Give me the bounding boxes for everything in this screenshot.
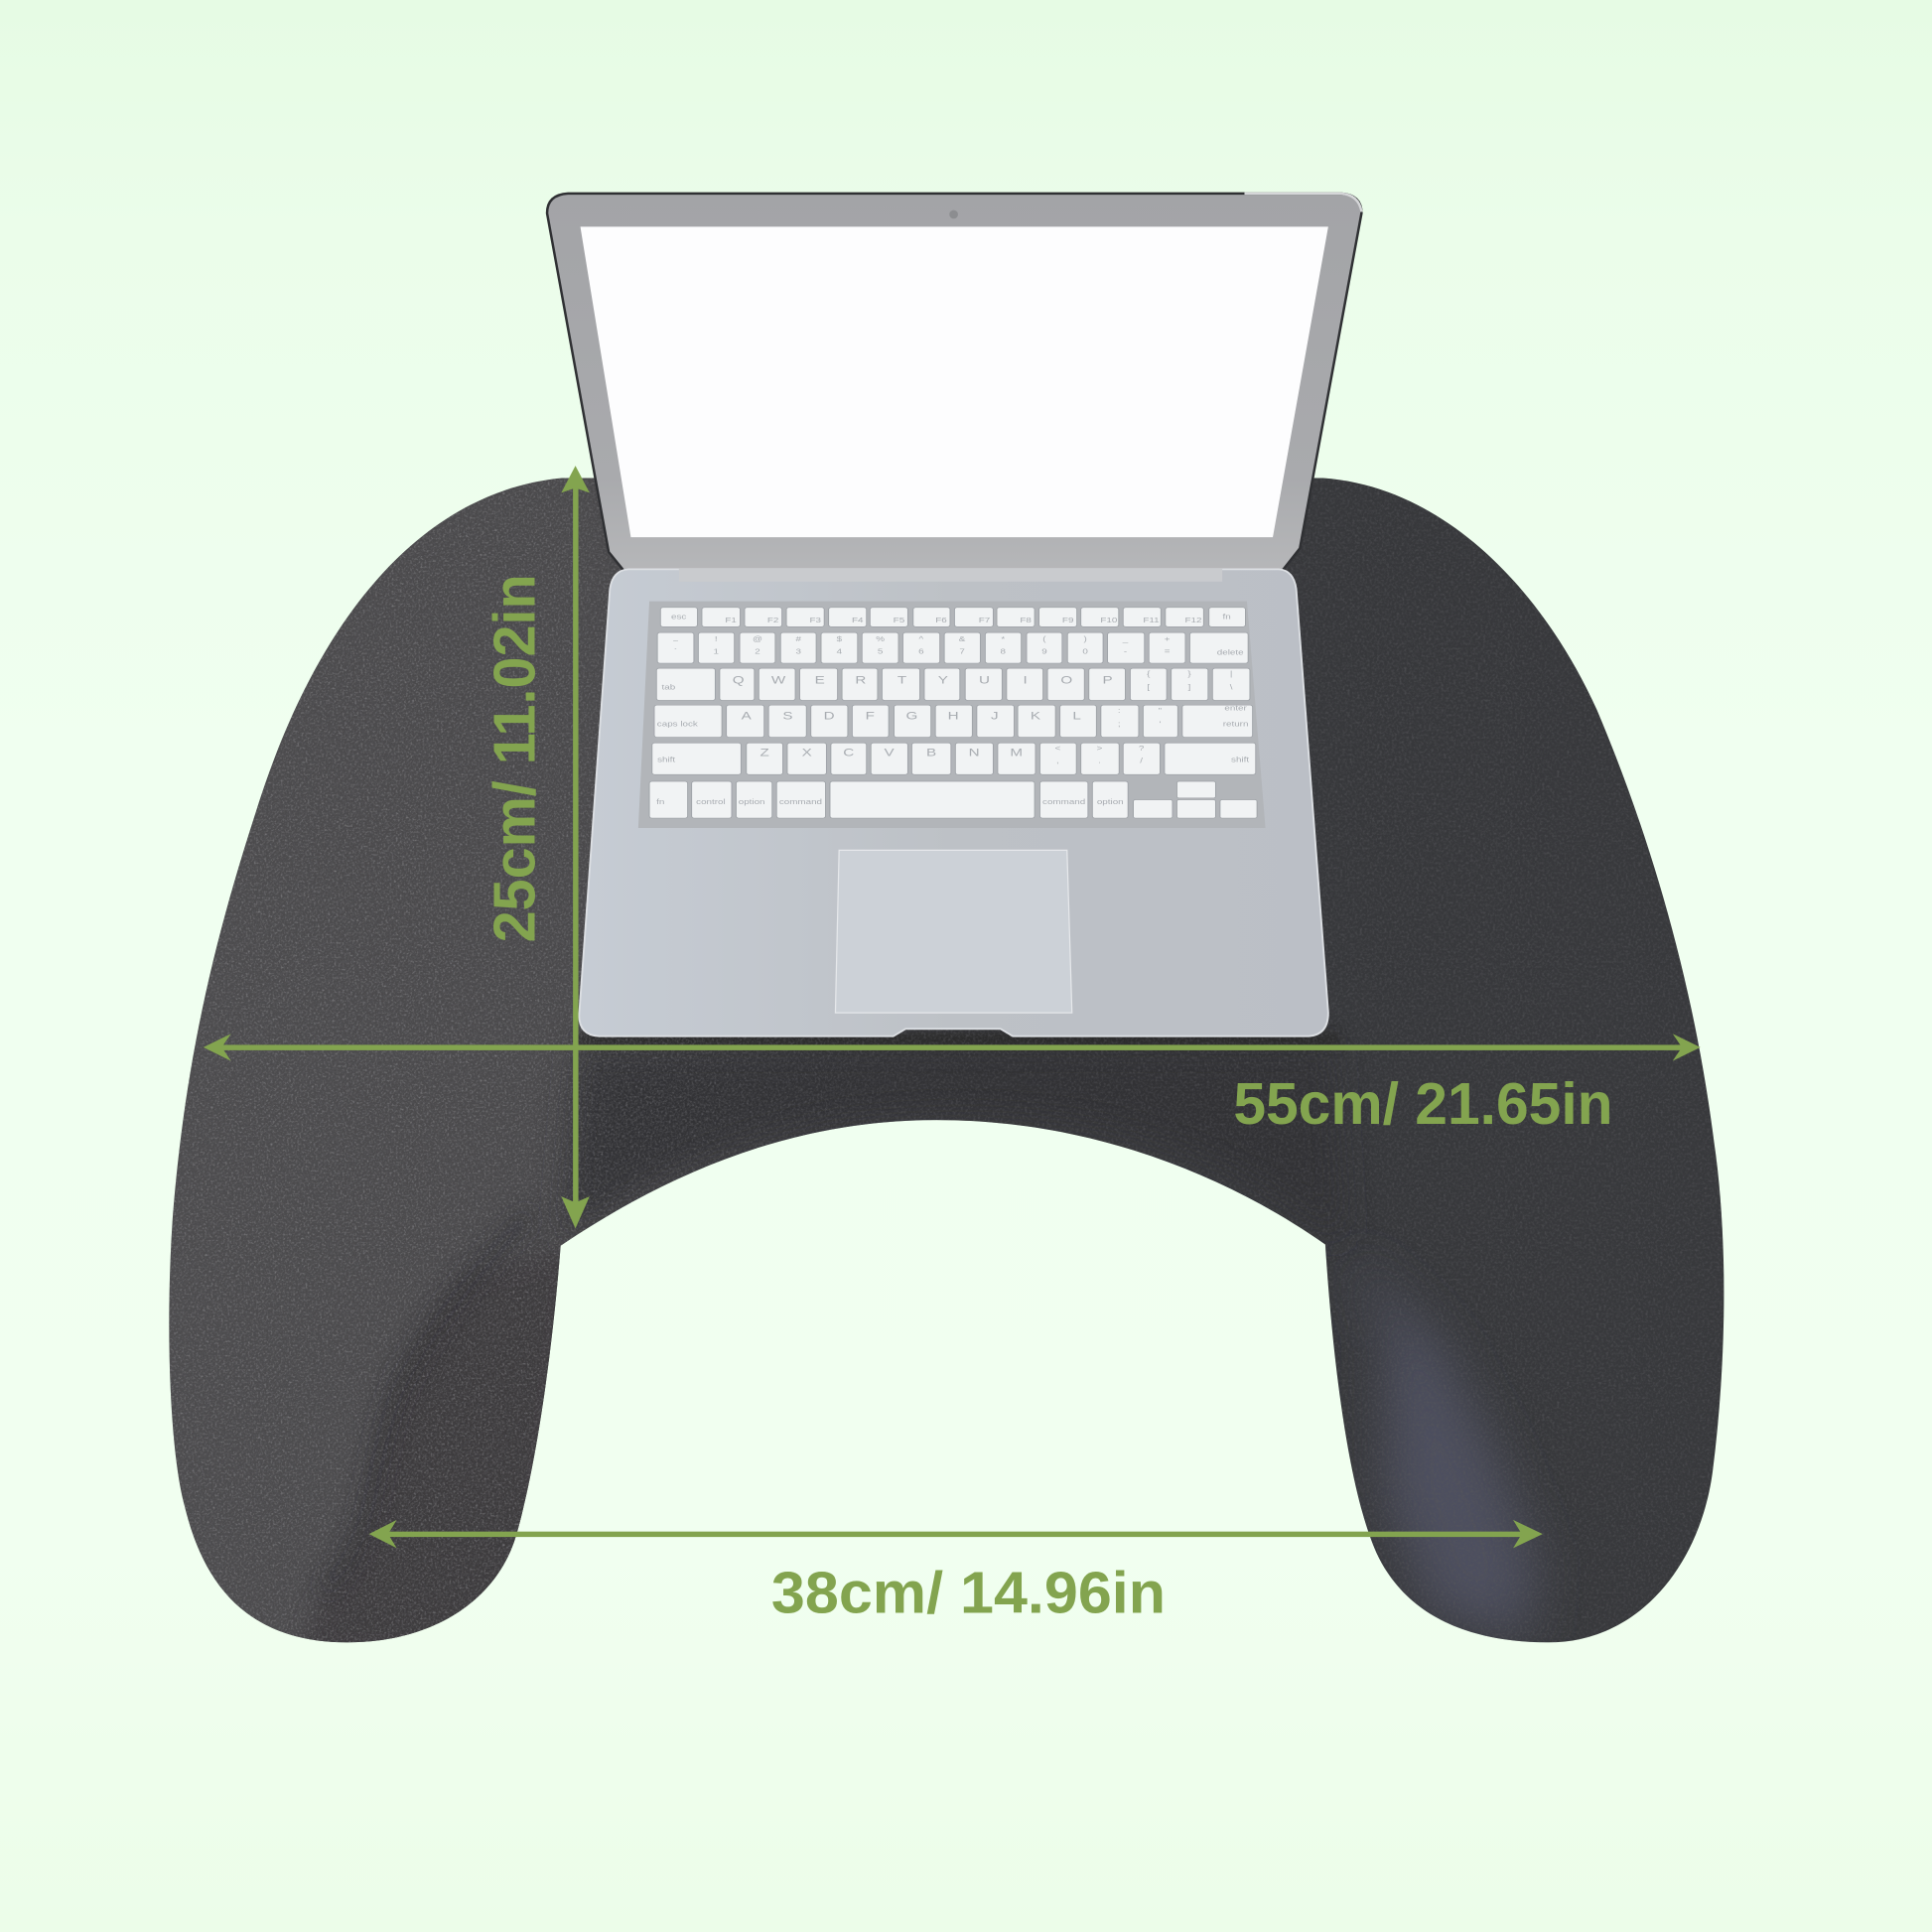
number row [657,632,1248,663]
left arm inner panel [296,1244,579,1657]
function row: F8 [1020,616,1032,624]
ZXCV row: X [802,747,812,759]
number row: & [959,634,966,643]
number row: ^ [919,634,924,643]
laptop lid [547,194,1361,572]
function row [660,608,1245,626]
number row: _ [1122,634,1128,643]
function row: F1 [725,616,737,624]
ZXCV row: M [1010,747,1023,759]
number row: 8 [1001,647,1006,655]
ZXCV row: C [843,747,855,759]
ASDF row: L [1072,709,1081,722]
ASDF row: J [991,709,999,722]
QWERTY row: [ [1147,683,1151,691]
QWERTY row: E [815,673,825,686]
right arm blue panel [1349,1251,1535,1639]
ZXCV row: V [885,747,895,759]
QWERTY row: R [855,673,867,686]
QWERTY row: { [1147,669,1151,678]
bottom row: option [1097,797,1124,806]
number row: 5 [878,647,884,655]
number row: ~ [673,636,678,645]
ASDF row: K [1031,709,1040,722]
function row: F2 [767,616,779,624]
number row: 3 [795,647,801,655]
number row: delete [1217,648,1244,656]
hinge bar [679,568,1222,582]
bottom row: option [739,797,765,806]
number row: 0 [1082,647,1088,655]
function row: F9 [1062,616,1074,624]
function row: F11 [1143,616,1160,624]
ASDF row: : [1118,706,1121,715]
ZXCV row: . [1098,757,1101,764]
number row: * [1001,634,1006,643]
QWERTY row: Q [733,673,745,686]
webcam [949,210,958,218]
function row: F6 [935,616,947,624]
laptop [547,194,1361,1036]
keyboard [649,608,1257,818]
QWERTY row: P [1102,673,1113,686]
number row: 9 [1041,647,1047,655]
number row: # [795,634,801,643]
ASDF row: return [1223,720,1249,728]
number row: ` [674,647,677,655]
QWERTY row: O [1060,673,1072,686]
number row: $ [837,634,842,643]
dimension: width label: 55cm/ 21.65in [1233,1070,1613,1137]
number row: 6 [918,647,924,655]
number row: 7 [959,647,965,655]
ZXCV row: ? [1139,744,1145,753]
QWERTY row: U [979,673,990,686]
dimension: inner width label: 38cm/ 14.96in [771,1560,1166,1626]
QWERTY row: tab [662,683,675,691]
QWERTY row [656,668,1250,700]
ASDF row: F [866,709,875,722]
number row: - [1124,647,1127,655]
ASDF row: D [824,709,835,722]
QWERTY row: I [1024,673,1028,686]
number row: ( [1042,634,1046,643]
ASDF row: caps lock [657,720,699,728]
ZXCV row: B [926,747,936,759]
number row: ) [1084,634,1087,643]
number row: 1 [714,647,719,655]
ASDF row: G [906,709,917,722]
laptop base [579,569,1328,1036]
ASDF row: H [948,709,959,722]
cushion [148,456,1749,1676]
trackpad [835,850,1072,1013]
number row: 4 [837,647,842,655]
number row: + [1165,634,1170,643]
number row: % [876,634,885,643]
bottom row: fn [656,797,665,806]
QWERTY row: | [1230,669,1232,678]
ZXCV row: Z [759,747,769,759]
dimension: depth arrow [561,466,590,1228]
function row: F5 [894,616,904,624]
ZXCV row: shift [1231,756,1250,763]
QWERTY row: } [1187,669,1191,678]
function row: fn [1223,613,1231,621]
fabric texture [148,456,1749,1676]
screen [581,226,1328,537]
function row: F3 [809,616,821,624]
ZXCV row: / [1140,757,1144,764]
ASDF row: S [782,709,793,722]
laptop contact shadow [577,1033,1340,1047]
ASDF row [654,704,1253,738]
QWERTY row: ] [1188,683,1190,691]
ZXCV row: , [1056,757,1059,764]
number row: = [1165,647,1170,655]
dimension: depth label: 25cm/ 11.02in [482,574,548,942]
ASDF row: A [742,709,752,722]
QWERTY row: T [897,673,906,686]
QWERTY row: W [771,673,786,686]
ZXCV row: > [1097,744,1102,753]
ASDF row: ' [1159,720,1162,728]
dimension: width arrow [204,1034,1701,1061]
bottom row [649,781,1257,818]
number row: @ [753,634,762,643]
number row: ! [715,634,718,643]
QWERTY row: \ [1230,683,1233,691]
function row: F7 [979,616,990,624]
function row: esc [671,613,687,621]
left crease [323,1213,530,1589]
keyboard well [638,602,1266,828]
ZXCV row [652,743,1256,774]
ASDF row: " [1159,706,1162,715]
ASDF row: enter [1224,704,1247,712]
ZXCV row: N [969,747,980,759]
lid top highlight [1244,194,1361,211]
centre dark band [562,1047,1343,1244]
function row: F12 [1185,616,1202,624]
QWERTY row: Y [938,673,948,686]
ZXCV row: < [1055,744,1060,753]
ZXCV row: shift [657,756,676,763]
function row: F10 [1100,616,1118,624]
number row: 2 [755,647,760,655]
bottom row: command [779,797,822,806]
function row: F4 [852,616,864,624]
bottom row: control [696,797,726,806]
bottom row: command [1042,797,1085,806]
ASDF row: ; [1118,720,1121,728]
dimension: inner width arrow [369,1520,1543,1548]
